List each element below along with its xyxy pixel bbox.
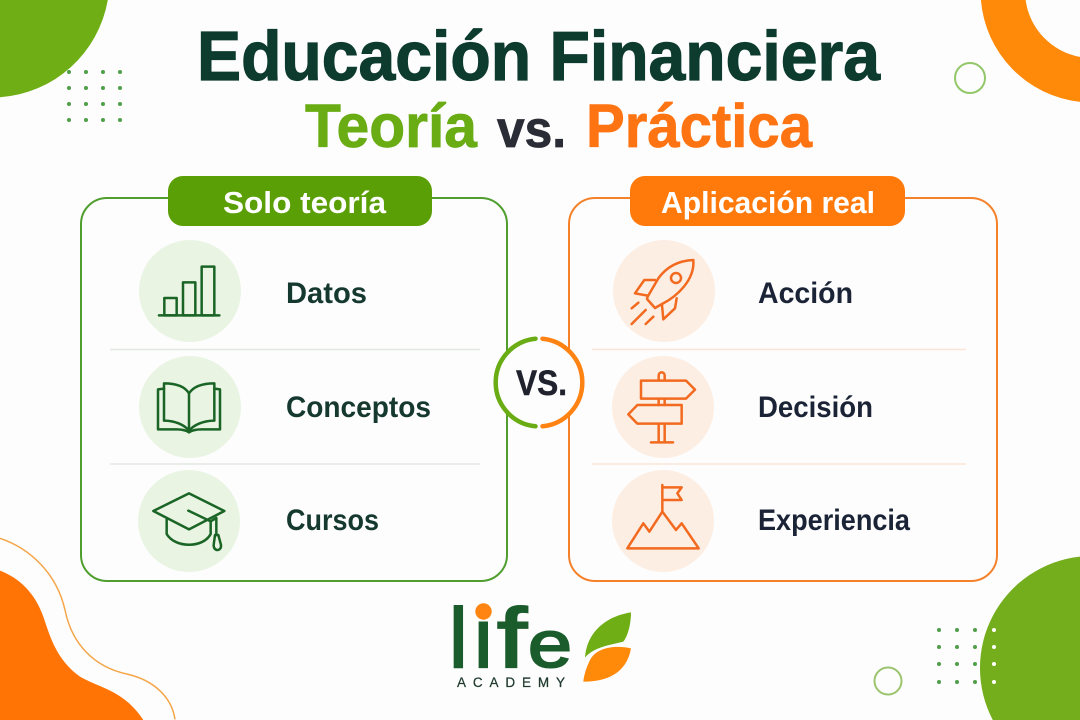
decoration: bottom-left thin wave line bbox=[0, 538, 175, 719]
badge: solo teoría: Solo teoría bbox=[223, 185, 387, 220]
logo: life academy bbox=[449, 591, 631, 690]
badge: aplicación real bbox=[630, 176, 905, 226]
title word: Teoría: Teoría bbox=[305, 92, 478, 160]
logo word: life: f bbox=[497, 591, 528, 685]
decoration: bottom-right dot grid bbox=[937, 628, 996, 684]
panel: aplicación real bbox=[569, 176, 997, 581]
label: Experiencia: Experiencia bbox=[758, 504, 910, 537]
decoration: top-left green circle bbox=[0, 0, 108, 97]
logo leaves bbox=[583, 612, 631, 682]
label: Conceptos: Conceptos bbox=[286, 391, 431, 424]
panel frame bbox=[81, 198, 507, 581]
label: Cursos: Cursos bbox=[286, 504, 379, 537]
icon: bar chart bbox=[139, 240, 241, 342]
icon: mountain with flag bbox=[612, 470, 714, 572]
panel frame bbox=[569, 198, 997, 581]
logo dot bbox=[475, 603, 492, 620]
decoration: top-left dot grid bbox=[67, 70, 122, 122]
label: Datos: Datos bbox=[286, 277, 367, 310]
title word: vs.: vs. bbox=[497, 101, 566, 159]
panel: solo teoría bbox=[81, 176, 507, 581]
label: Acción: Acción bbox=[758, 277, 853, 310]
icon: graduation cap bbox=[138, 470, 240, 572]
title bbox=[197, 17, 881, 160]
logo word: life: e bbox=[528, 607, 572, 681]
decoration: bottom-left orange blob bbox=[0, 571, 143, 720]
vs badge bbox=[496, 339, 582, 426]
vs badge: VS. bbox=[516, 364, 567, 403]
icon: signpost bbox=[612, 356, 714, 458]
title word: Práctica: Práctica bbox=[586, 92, 813, 160]
decoration: bottom-right green circle bbox=[980, 557, 1080, 720]
label: Decisión: Decisión bbox=[758, 391, 873, 424]
decoration: small green ring top right bbox=[955, 63, 985, 93]
decoration: small green ring bottom right bbox=[874, 668, 902, 694]
title line 1: Educación Financiera bbox=[197, 17, 881, 95]
logo word: academy: ACADEMY bbox=[457, 675, 565, 690]
decoration: top-right orange ring bbox=[981, 0, 1080, 102]
icon: open book bbox=[139, 356, 241, 458]
icon: rocket bbox=[613, 240, 715, 342]
logo word: life: i bbox=[474, 591, 493, 685]
badge: solo teoría bbox=[168, 176, 432, 226]
logo word: life: l bbox=[449, 591, 468, 685]
badge: aplicación real: Aplicación real bbox=[661, 185, 875, 220]
